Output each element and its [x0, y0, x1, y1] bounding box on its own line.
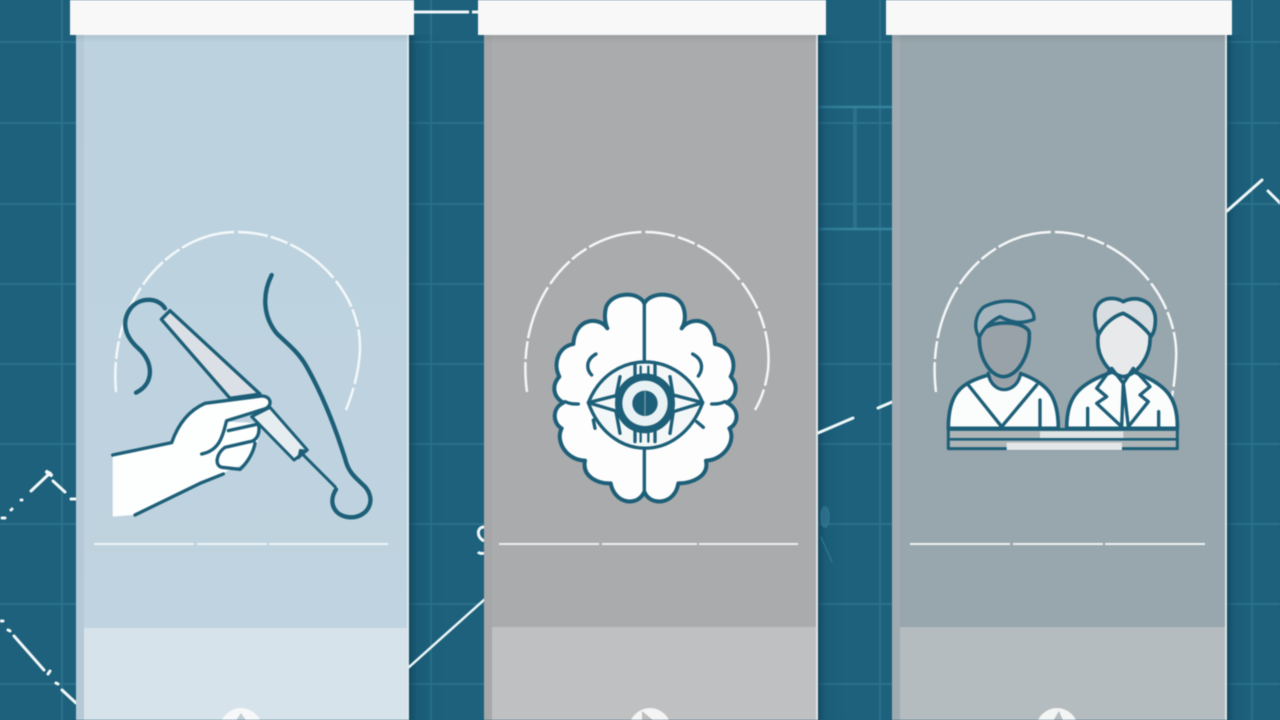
- dashed arc: right: [935, 232, 1176, 410]
- icon: two people at a desk: [948, 298, 1177, 450]
- badge: left: [220, 708, 262, 720]
- panel: left: [76, 35, 409, 720]
- header box: right: [886, 0, 1232, 35]
- divider: center: [499, 543, 798, 545]
- header box: left: [70, 0, 414, 35]
- header box: center: [478, 0, 826, 35]
- badge: center: [629, 708, 671, 720]
- trend line: center right: [818, 402, 892, 433]
- person: left: [948, 301, 1058, 428]
- panel: center: [484, 35, 818, 720]
- divider: left: [94, 543, 388, 545]
- divider: right: [910, 543, 1206, 545]
- faint figure in gutter: [821, 507, 832, 562]
- trend line: center left: [408, 599, 485, 668]
- lower section: right: [900, 627, 1225, 720]
- trend line: upper left dashed: [2, 472, 76, 518]
- trend line: far right: [1227, 180, 1280, 211]
- desk: [948, 429, 1177, 450]
- lower section: left: [84, 628, 407, 720]
- fragment of glyph behind panel: [478, 527, 484, 553]
- icon: hand holding surgical tool: [113, 275, 370, 517]
- icon: brain with eye: [554, 295, 737, 502]
- trend line: top: [414, 10, 478, 14]
- dashed arc: left: [115, 232, 360, 410]
- person: right: [1067, 298, 1177, 428]
- badge: right: [1036, 708, 1078, 720]
- trend line: lower left dashed: [0, 621, 76, 703]
- lower section: center: [492, 627, 816, 720]
- panel: right: [892, 35, 1227, 720]
- dashed arc: center: [525, 232, 769, 410]
